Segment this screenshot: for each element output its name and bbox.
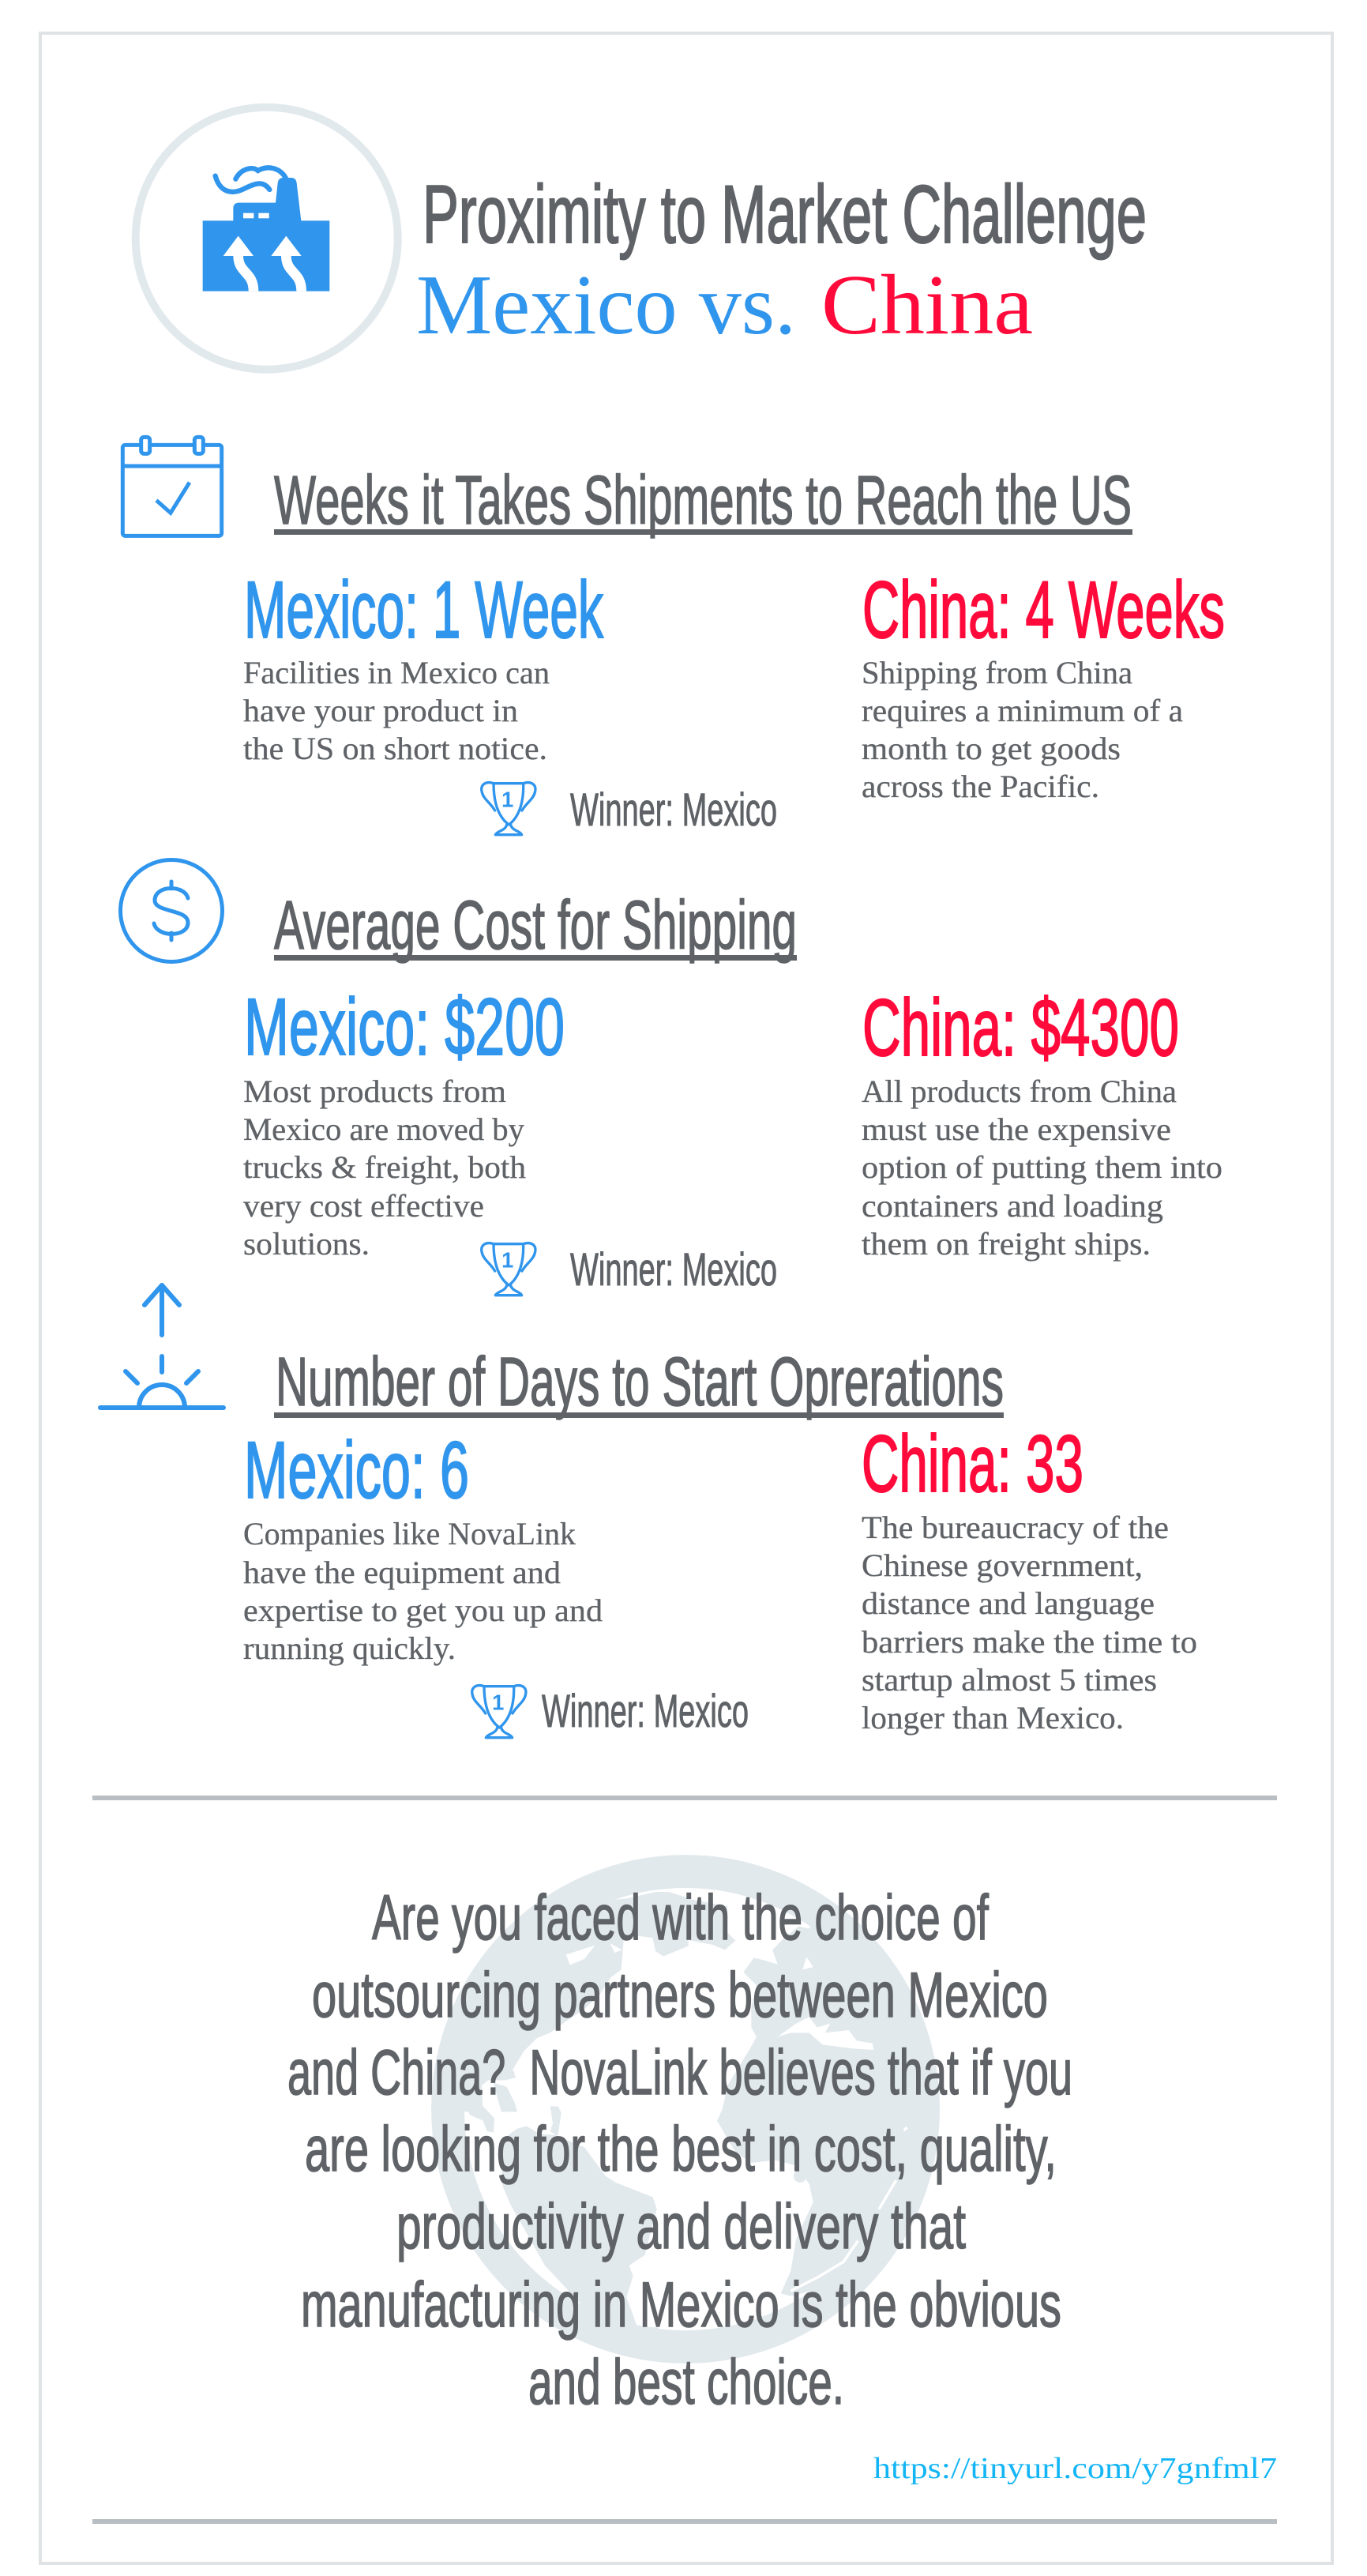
China column: option of putting them into — [862, 1149, 1222, 1185]
winner label: Winner: Mexico — [570, 784, 777, 836]
China column: containers and loading — [862, 1188, 1163, 1224]
China column — [862, 983, 1222, 1262]
Mexico column — [243, 982, 565, 1262]
Mexico column: very cost effective — [243, 1188, 484, 1224]
winner label: Winner: Mexico — [570, 1244, 777, 1296]
section: weeks to reach the US — [122, 437, 1225, 836]
Mexico column: Mexico: $200 — [244, 982, 565, 1072]
Mexico column: solutions. — [243, 1226, 370, 1262]
China column: China: $4300 — [862, 983, 1179, 1073]
Mexico column: Companies like NovaLink — [243, 1516, 576, 1551]
China column: startup almost 5 times — [862, 1662, 1157, 1698]
icon: globe background — [448, 1871, 948, 2347]
China column — [862, 1419, 1197, 1736]
Mexico column: Mexico: 1 Week — [244, 565, 604, 655]
icon: dollar coin — [120, 859, 223, 962]
section: days to start operations — [100, 1285, 1197, 1738]
Mexico column: Most products from — [243, 1074, 506, 1109]
Mexico column: Facilities in Mexico can — [243, 655, 550, 690]
heading: Number of Days to Start Oprerations — [276, 1344, 1004, 1420]
China column: The bureaucracy of the — [862, 1510, 1169, 1545]
Mexico column: the US on short notice. — [243, 731, 547, 766]
China column: Chinese government, — [862, 1547, 1143, 1583]
icon: trophy: 1 — [492, 1690, 504, 1715]
Mexico column: Mexico: 6 — [244, 1425, 469, 1515]
China column: distance and language — [862, 1585, 1155, 1621]
Mexico column: Mexico are moved by — [243, 1111, 524, 1147]
Mexico column: expertise to get you up and — [243, 1593, 603, 1628]
China column: All products from China — [862, 1074, 1177, 1109]
winner label: Winner: Mexico — [542, 1686, 749, 1737]
icon: factory in circle — [136, 107, 398, 370]
header — [136, 107, 1147, 370]
China column: must use the expensive — [862, 1111, 1171, 1147]
Mexico column — [243, 565, 604, 766]
subtitle: China — [821, 258, 1033, 352]
Mexico column: have the equipment and — [243, 1555, 561, 1590]
icon: trophy — [482, 783, 535, 835]
China column: Shipping from China — [862, 655, 1132, 690]
China column: barriers make the time to — [862, 1624, 1197, 1660]
China column: longer than Mexico. — [862, 1700, 1124, 1736]
China column: China: 33 — [862, 1419, 1083, 1509]
Mexico column — [243, 1425, 603, 1666]
China column — [862, 565, 1225, 804]
closing statement — [287, 1882, 1072, 2418]
Mexico column: running quickly. — [243, 1630, 456, 1666]
subtitle: Mexico vs. — [416, 258, 796, 352]
icon: trophy: 1 — [501, 1248, 513, 1273]
icon: calendar — [122, 437, 222, 536]
closing statement: Are you faced with the choice of — [372, 1882, 989, 1954]
source link: https://tinyurl.com/y7gnfml7 — [873, 2452, 1277, 2485]
China column: them on freight ships. — [862, 1226, 1151, 1262]
Mexico column: have your product in — [243, 693, 518, 728]
icon: trophy: 1 — [501, 788, 513, 812]
closing statement: productivity and delivery that — [396, 2191, 966, 2262]
China column: across the Pacific. — [862, 769, 1099, 804]
China column: month to get goods — [862, 731, 1121, 766]
icon: sunrise with arrow — [100, 1285, 223, 1408]
icon: trophy — [472, 1686, 526, 1738]
closing statement: outsourcing partners between Mexico — [312, 1960, 1048, 2031]
China column: requires a minimum of a — [862, 693, 1183, 728]
heading — [274, 1344, 1004, 1420]
section: average shipping cost — [120, 859, 1222, 1296]
closing statement: and best choice. — [528, 2347, 844, 2418]
closing statement: are looking for the best in cost, quality, — [305, 2114, 1057, 2185]
Mexico column: trucks & freight, both — [243, 1149, 526, 1185]
subtitle — [416, 258, 1033, 352]
heading — [274, 887, 797, 964]
icon: trophy — [482, 1243, 535, 1296]
heading: Average Cost for Shipping — [274, 887, 797, 964]
